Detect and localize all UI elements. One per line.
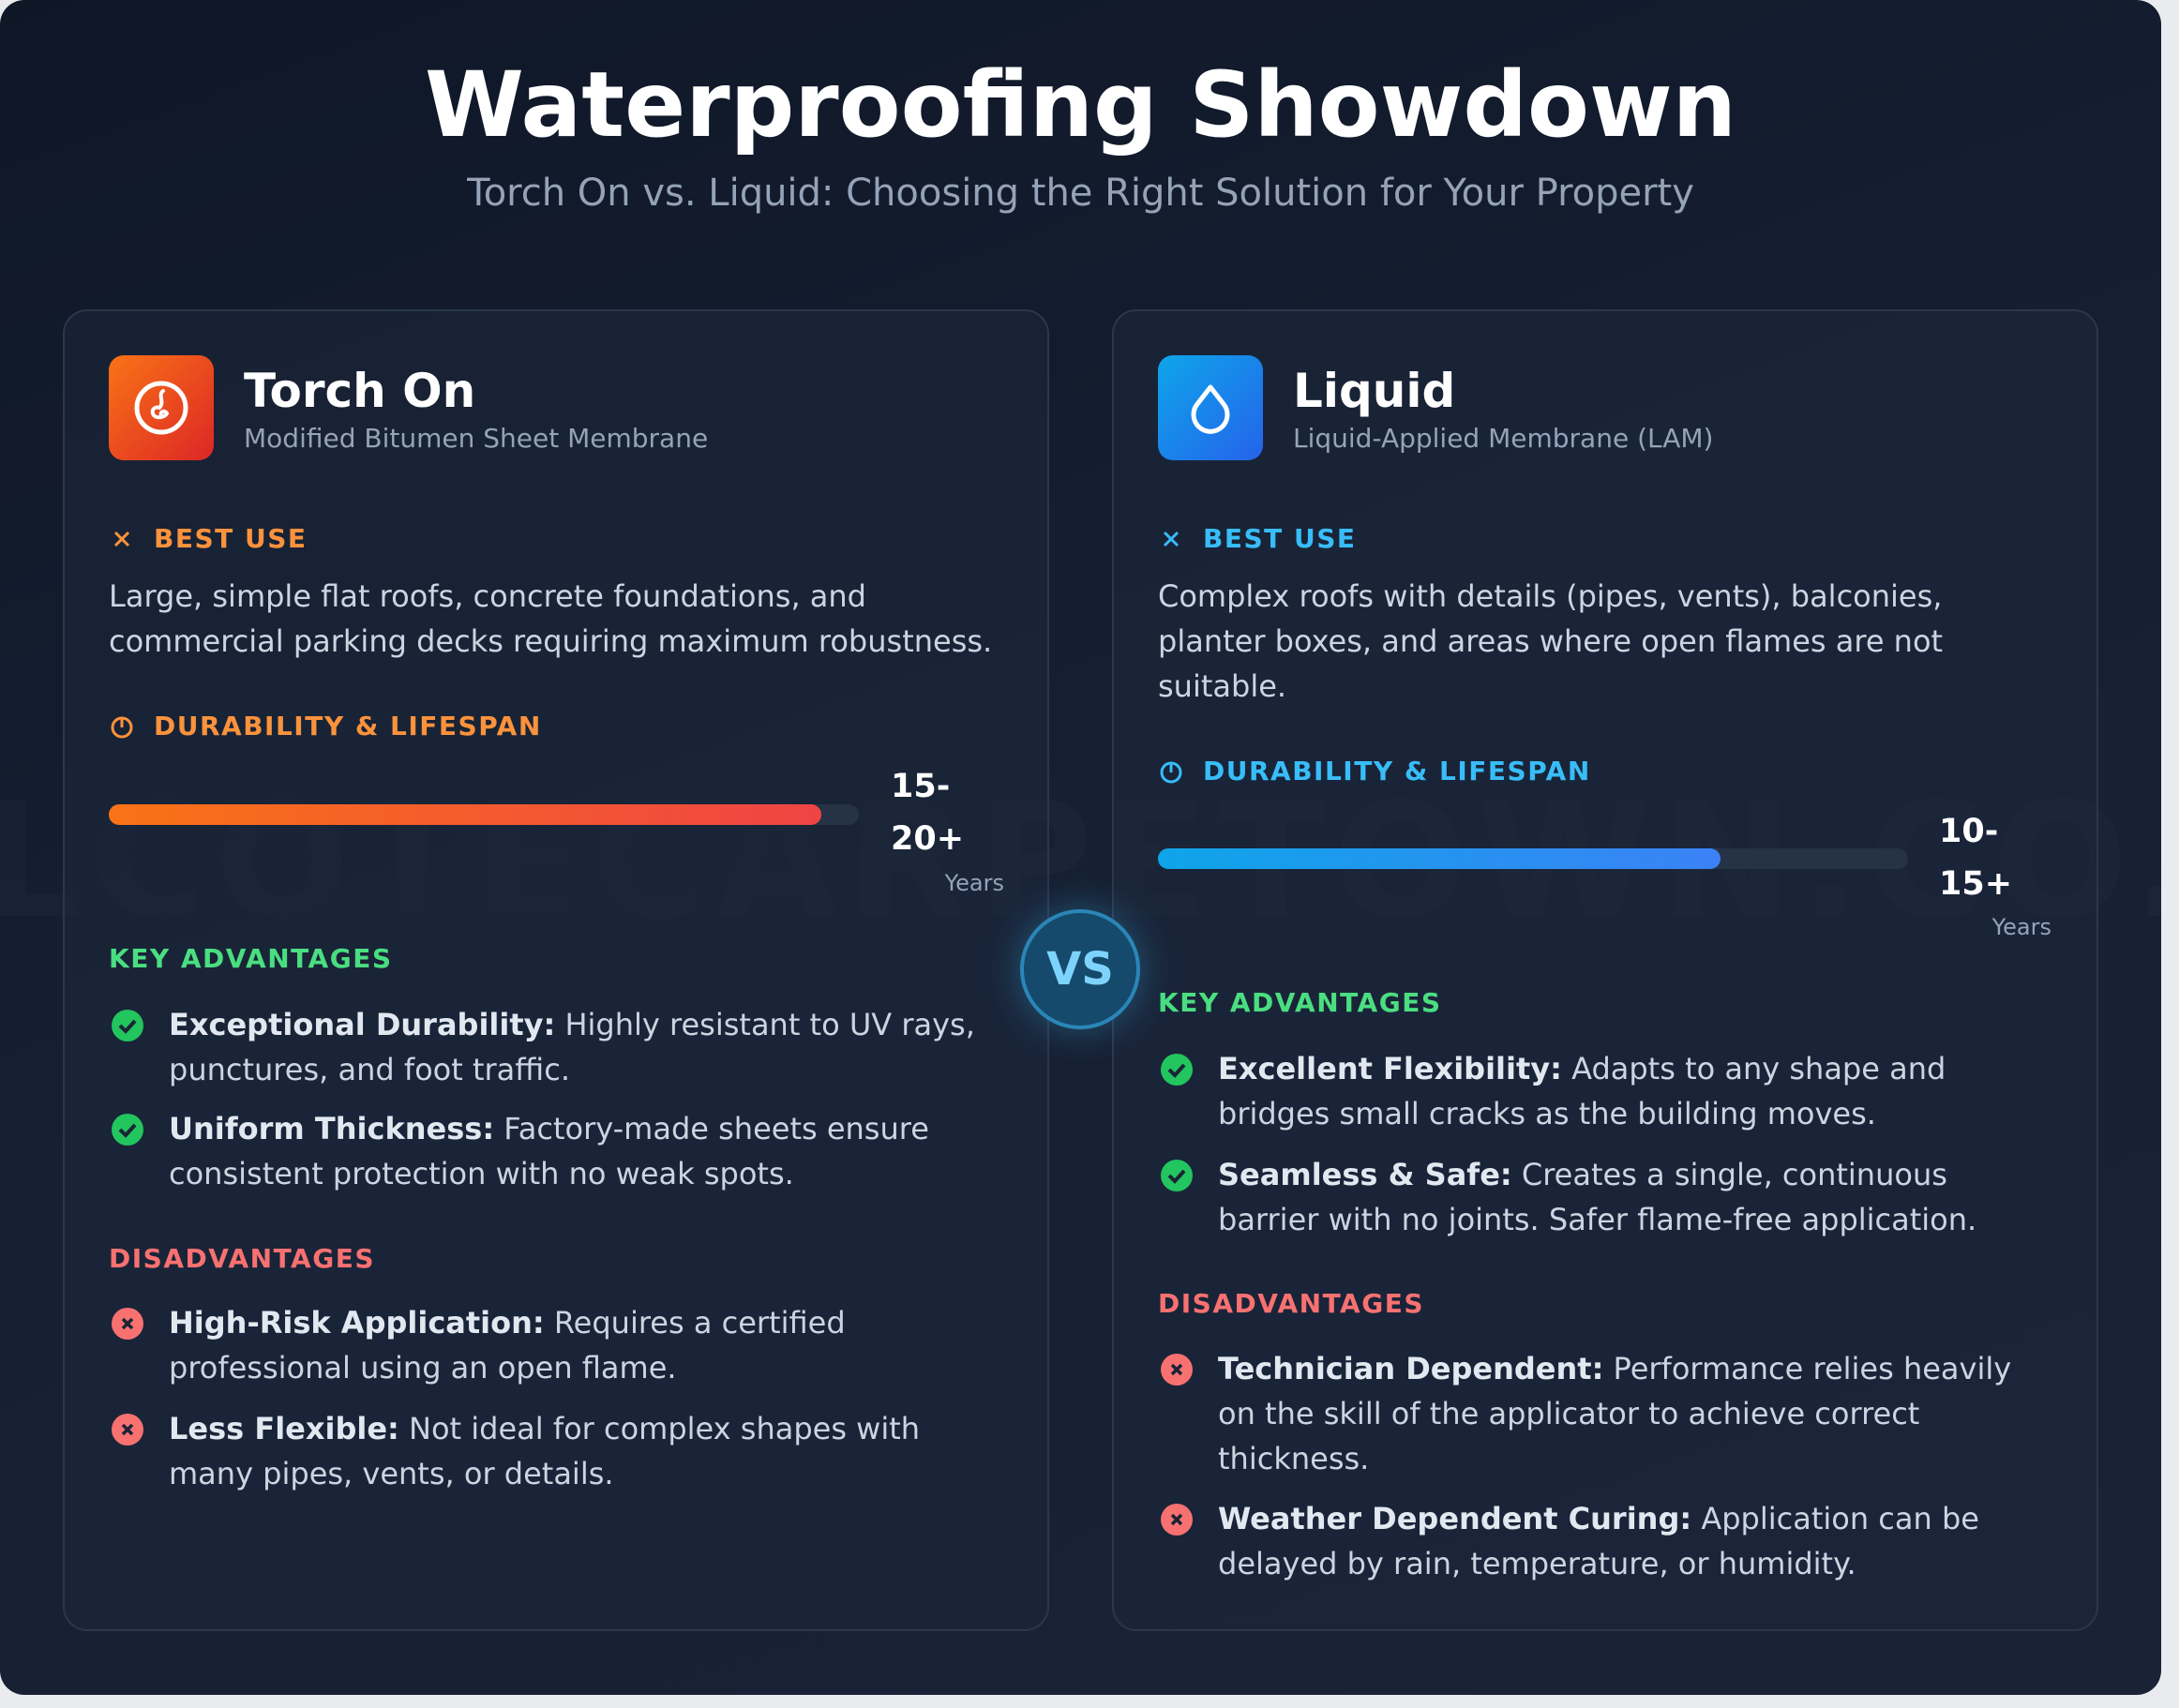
subtitle: Torch On vs. Liquid: Choosing the Right Solution for Your Property <box>467 172 1694 215</box>
label: durability: DURABILITY & LIFESPAN <box>154 711 542 742</box>
heading: Torch On <box>244 364 475 418</box>
value: 15-20+: 15- <box>891 768 950 805</box>
label: disadvantages: DISADVANTAGES <box>109 1243 375 1274</box>
advantage 1: Excellent Flexibility: Adapts to any shape and bridges small cracks as the building moves. <box>1218 1051 1946 1131</box>
disadvantage 1: Technician Dependent: Performance relies heavily on the skill of the applicator to achieve correct thickness. <box>1218 1351 2011 1476</box>
years: Years <box>1992 914 2051 940</box>
label: disadvantages: DISADVANTAGES <box>1158 1288 1424 1319</box>
value: 15-20+ <box>891 768 964 858</box>
disadvantage 1: High-Risk Application: Requires a certified professional using an open flame. <box>169 1305 846 1386</box>
text: best use: Complex roofs with details (pipes, vents), balconies, planter boxes, and areas where open flames are not suitable. <box>1158 578 1943 704</box>
value: 10-15+: 15+ <box>1939 865 2012 903</box>
icon: torch <box>109 355 214 460</box>
panel: torch on <box>63 309 1049 1631</box>
value: 15-20+: 20+ <box>891 820 964 858</box>
bar: lifespan <box>1158 848 1908 869</box>
vs badge: VS <box>1046 943 1114 996</box>
vs badge <box>1020 909 1140 1029</box>
label: best use: BEST USE <box>154 523 308 554</box>
label: durability: DURABILITY & LIFESPAN <box>1203 756 1591 787</box>
advantage 2: Uniform Thickness: Factory-made sheets ensure consistent protection with no weak spots. <box>169 1111 929 1191</box>
disadvantage 2: Less Flexible: Not ideal for complex shapes with many pipes, vents, or details. <box>169 1411 920 1491</box>
advantage 1: Exceptional Durability: Highly resistant to UV rays, punctures, and foot traffic. <box>169 1007 975 1087</box>
text: LCOTECARPETOWN.CO. <box>0 769 2161 954</box>
bar: lifespan <box>109 804 859 825</box>
label: advantages: KEY ADVANTAGES <box>1158 987 1442 1018</box>
text: best use: Large, simple flat roofs, concrete foundations, and commercial parking decks requiring maximum robustness. <box>109 578 992 659</box>
value: 10-15+ <box>1939 813 2012 903</box>
label: advantages: KEY ADVANTAGES <box>109 943 393 974</box>
subheading: Liquid-Applied Membrane (LAM) <box>1293 423 1713 454</box>
disadvantage 2: Weather Dependent Curing: Application can be delayed by rain, temperature, or humidity. <box>1218 1501 1979 1581</box>
icon: drop <box>1158 355 1263 460</box>
title: Waterproofing Showdown <box>425 52 1736 157</box>
label: best use: BEST USE <box>1203 523 1357 554</box>
years: Years <box>945 870 1004 896</box>
subheading: Modified Bitumen Sheet Membrane <box>244 423 708 454</box>
heading: Liquid <box>1293 364 1455 418</box>
value: 10-15+: 10- <box>1939 813 1998 850</box>
advantage 2: Seamless & Safe: Creates a single, continuous barrier with no joints. Safer flame-free application. <box>1218 1157 1976 1237</box>
panel: liquid <box>1112 309 2098 1631</box>
